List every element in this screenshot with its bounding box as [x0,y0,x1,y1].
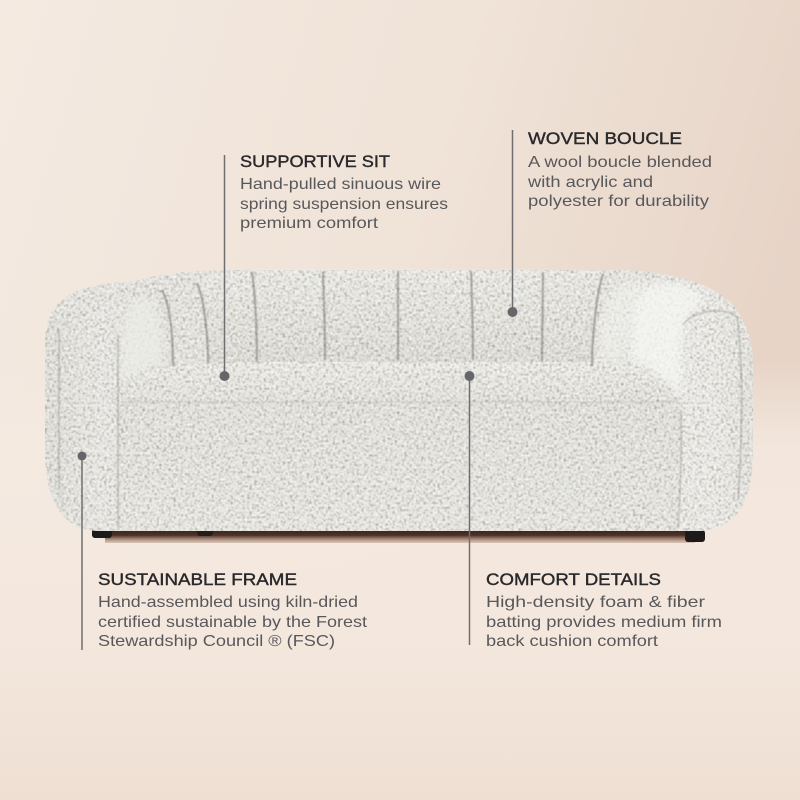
sofa [44,268,756,543]
back cushion panels [162,270,603,367]
leader line [224,155,226,375]
description: spring suspension ensures [240,196,448,213]
description [527,154,712,210]
callout: comfort details [464,371,722,650]
description [240,176,448,232]
leader line [468,376,470,645]
boucle texture [44,268,756,532]
seat cushion [118,362,681,529]
heading: WOVEN BOUCLE [528,129,682,148]
callout: sustainable frame [78,452,368,650]
description: High-density foam & fiber [486,594,706,611]
description: certified sustainable by the Forest [98,614,368,631]
description: Stewardship Council ® (FSC) [98,633,335,650]
sofa feet and under-shadow [92,526,705,543]
heading: COMFORT DETAILS [486,570,661,589]
description: Hand-assembled using kiln-dried [98,594,358,611]
description: with acrylic and [527,174,653,191]
description: back cushion comfort [486,633,659,650]
sofa seams [59,311,742,528]
marker dot [508,307,518,317]
leader line [512,130,514,311]
marker dot [464,371,474,381]
description [486,594,722,650]
description: premium comfort [240,215,379,232]
heading: SUPPORTIVE SIT [240,152,390,171]
description: A wool boucle blended [528,154,712,171]
marker dot [220,371,230,381]
smooth inner arm highlights [121,280,705,395]
callout: supportive sit [220,152,448,381]
sofa upholstery [44,268,756,532]
callout: woven boucle [508,129,712,317]
channel shadows [162,271,603,366]
left arm [45,288,173,529]
marker dot [78,452,86,460]
sofa body silhouette [45,270,753,531]
heading: SUSTAINABLE FRAME [98,570,297,589]
leader line [81,456,83,650]
right arm [626,277,753,531]
description: polyester for durability [528,193,709,210]
description: batting provides medium firm [486,614,722,631]
description: Hand-pulled sinuous wire [240,176,441,193]
description [98,594,368,650]
